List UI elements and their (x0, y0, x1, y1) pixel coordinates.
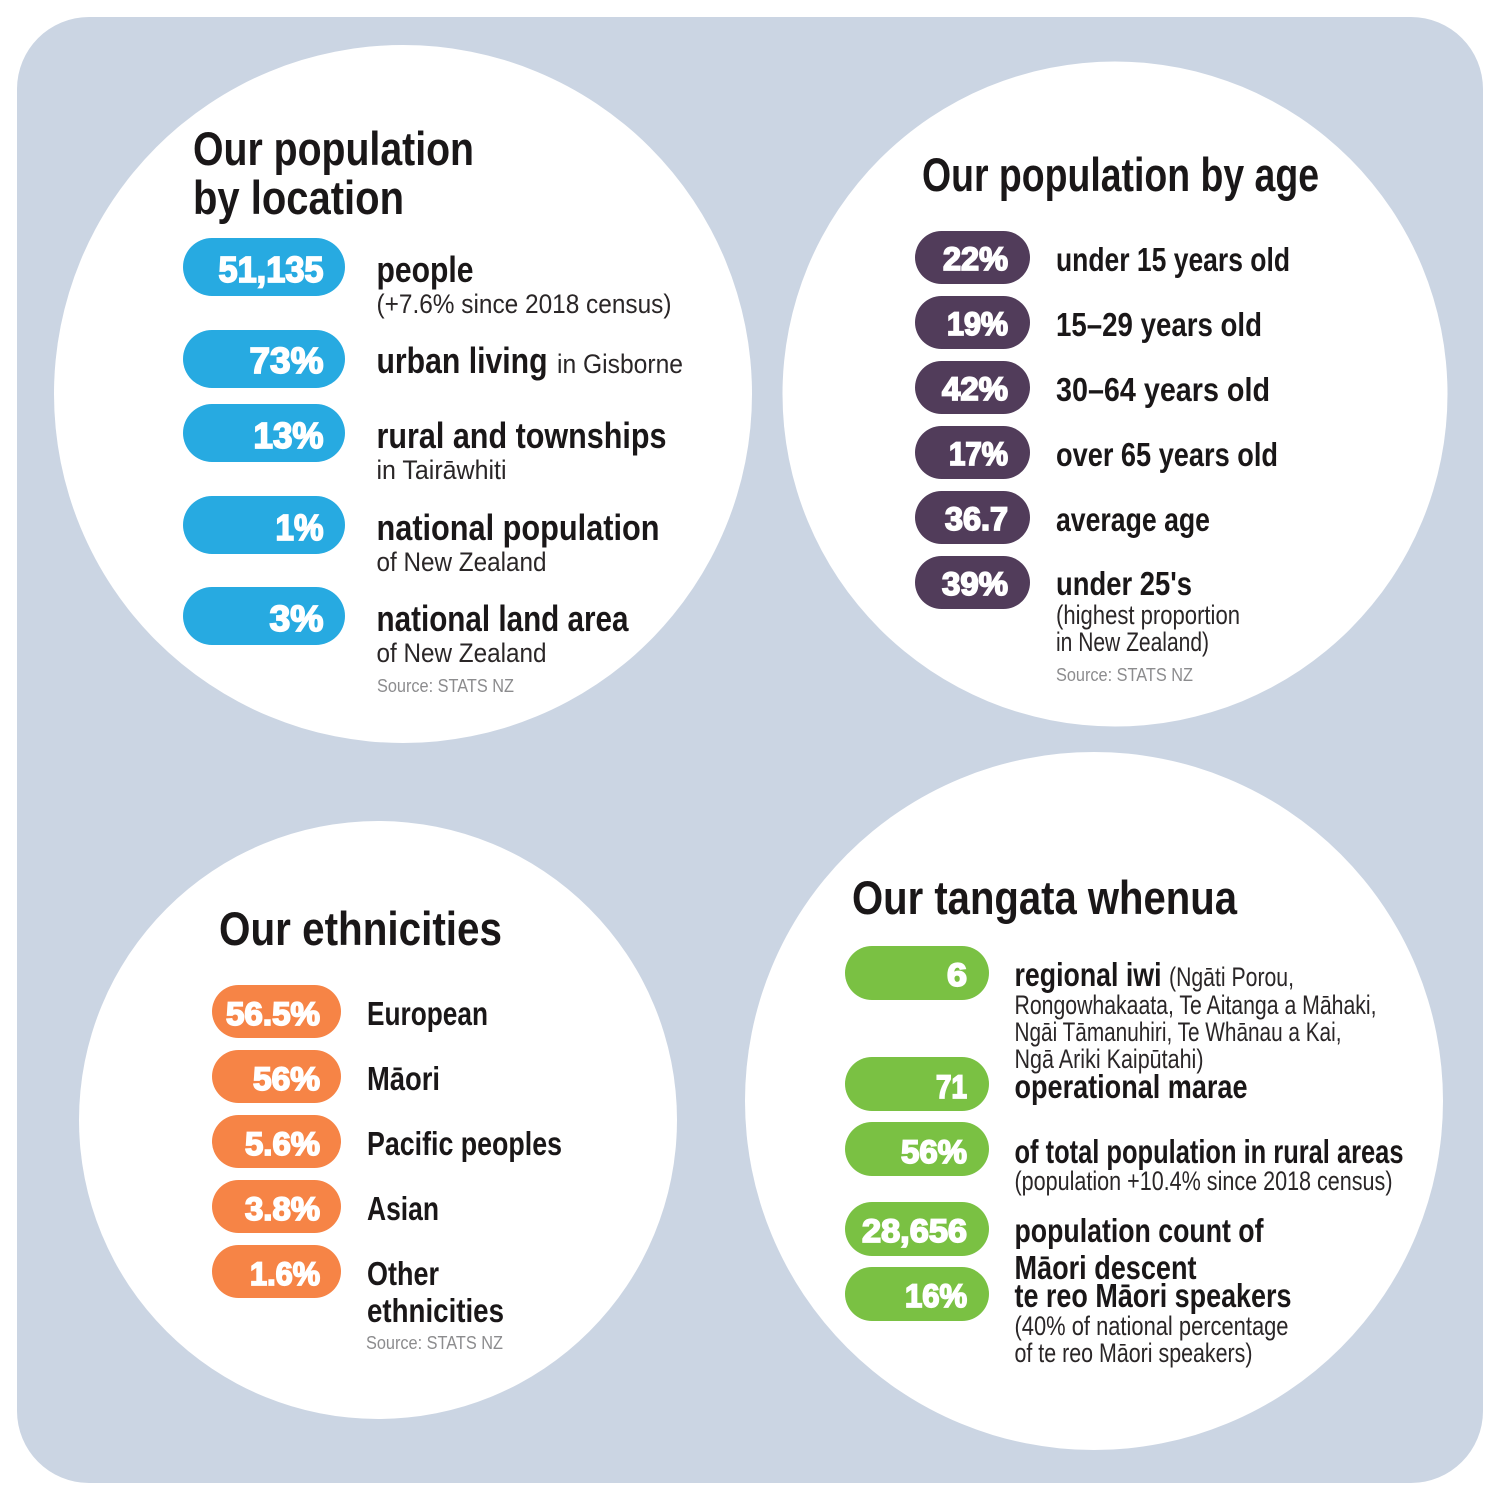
stat: regional iwi: 6 (947, 957, 967, 993)
heading: tangata whenua: Our tangata whenua (852, 871, 1238, 924)
stat: over 65: 17% (949, 436, 1008, 472)
stat: 15-29: 15–29 years old (1056, 306, 1262, 343)
stat: Maori: 56% (253, 1061, 320, 1097)
stat: national population: of New Zealand (376, 547, 546, 577)
stat: Pacific peoples: 5.6% (245, 1126, 320, 1162)
panel: population by location (54, 45, 752, 743)
stat: Maori descent: population count of (1014, 1212, 1264, 1249)
stat: regional iwi: Ngā Ariki Kaipūtahi) (1014, 1044, 1204, 1074)
stat: urban living (183, 330, 683, 388)
stat: rural and townships (183, 404, 666, 485)
stat: Asian: Asian (367, 1190, 439, 1227)
stat: urban living: 73% (250, 340, 324, 381)
stat: under 15 (915, 231, 1290, 284)
stat: Maori descent: 28,656 (862, 1213, 967, 1249)
stat: people (183, 238, 672, 319)
stat: national land area: 3% (270, 598, 324, 639)
stat: average age: 36.7 (945, 501, 1008, 537)
stat: urban living: in Gisborne (557, 349, 683, 379)
stat: te reo speakers: te reo Māori speakers (1014, 1277, 1292, 1314)
stat: regional iwi: (Ngāti Porou, (1169, 962, 1294, 992)
stat: rural population: 56% (901, 1134, 967, 1170)
stat: other ethnicities: Other (367, 1255, 439, 1292)
stat: other ethnicities (212, 1245, 504, 1329)
stat: under 25s: under 25's (1056, 565, 1192, 602)
stat: people: 51,135 (218, 249, 324, 290)
stat: te reo speakers: of te reo Māori speakers) (1014, 1338, 1252, 1368)
stat: regional iwi: regional iwi (1014, 956, 1162, 993)
stat: 15-29: 19% (947, 306, 1008, 342)
stat: national population: 1% (276, 507, 324, 548)
source note: Source: STATS NZ (1056, 665, 1193, 685)
stat: national population: national population (376, 507, 660, 548)
stat: over 65: over 65 years old (1056, 436, 1278, 473)
stat: 30-64 (915, 361, 1270, 414)
stat: regional iwi (845, 946, 1376, 1074)
stat: Maori descent: Māori descent (1014, 1249, 1197, 1286)
heading: population by location: by location (193, 171, 404, 224)
stat: Pacific peoples: Pacific peoples (367, 1125, 562, 1162)
heading: ethnicities: Our ethnicities (219, 902, 502, 955)
stat: rural and townships: rural and townships (376, 415, 666, 456)
stat: under 25s: 39% (942, 566, 1008, 602)
stat: European: 56.5% (226, 996, 320, 1032)
stat: 15-29 (915, 296, 1262, 349)
stat: Asian: 3.8% (245, 1191, 320, 1227)
stat: under 15: 22% (943, 241, 1008, 277)
heading: population by location (193, 122, 474, 224)
source note: Source: STATS NZ (377, 676, 514, 696)
stat: te reo speakers (845, 1267, 1292, 1368)
stat: 30-64: 30–64 years old (1056, 371, 1270, 408)
stat: rural and townships: 13% (254, 415, 324, 456)
stat: under 25s: in New Zealand) (1056, 627, 1209, 657)
panel: tangata whenua (745, 752, 1443, 1450)
stat: over 65 (915, 426, 1278, 479)
panel: population by age (782, 62, 1448, 726)
stat: national land area: of New Zealand (376, 638, 546, 668)
stat: operational marae (845, 1057, 1248, 1111)
stat: regional iwi: Rongowhakaata, Te Aitanga a Māhaki, (1014, 990, 1376, 1020)
stat: Maori: Māori (367, 1060, 440, 1097)
stat: under 25s: (highest proportion (1056, 600, 1240, 630)
stat: Pacific peoples (212, 1115, 562, 1168)
stat: national land area (183, 587, 629, 668)
source note: Source: STATS NZ (366, 1333, 503, 1353)
stat: urban living: urban living (376, 340, 548, 381)
stat: European (212, 985, 488, 1038)
stat: people: people (376, 249, 474, 290)
stat: 30-64: 42% (942, 371, 1008, 407)
stat: rural population: (population +10.4% since 2018 census) (1014, 1166, 1392, 1196)
stat: average age (915, 491, 1210, 544)
stat: Maori (212, 1050, 440, 1103)
stat: te reo speakers: (40% of national percentage (1014, 1311, 1288, 1341)
stat: regional iwi: Ngāi Tāmanuhiri, Te Whānau a Kai, (1014, 1017, 1342, 1047)
stat: national land area: national land area (376, 598, 629, 639)
stat: te reo speakers: 16% (905, 1278, 967, 1314)
stat: operational marae: 71 (936, 1069, 967, 1105)
stat: other ethnicities: 1.6% (250, 1256, 320, 1292)
stat: under 15: under 15 years old (1056, 241, 1290, 278)
stat: under 25s (915, 556, 1240, 657)
heading: population by age: Our population by age (922, 148, 1319, 201)
stat: average age: average age (1056, 501, 1210, 538)
stat: European: European (367, 995, 488, 1032)
stat: other ethnicities: ethnicities (367, 1292, 504, 1329)
stat: national population (183, 496, 660, 577)
heading: population by location: Our population (193, 122, 474, 175)
stat: Maori descent (845, 1202, 1264, 1286)
stat: people: (+7.6% since 2018 census) (376, 289, 672, 319)
stat: operational marae: operational marae (1014, 1068, 1248, 1105)
stat: Asian (212, 1180, 439, 1233)
stat: rural population (845, 1122, 1404, 1196)
stat: rural and townships: in Tairāwhiti (376, 455, 506, 485)
panel: ethnicities (79, 821, 677, 1419)
